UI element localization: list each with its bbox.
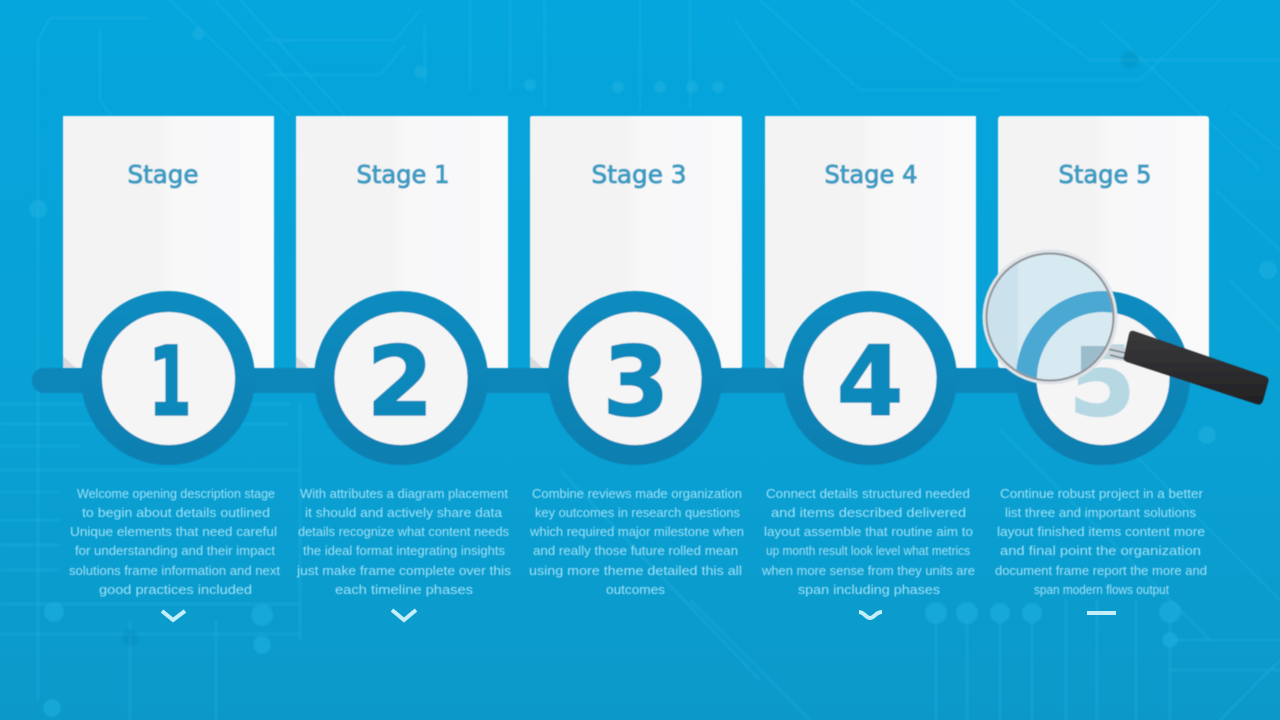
text block: stage 1 description: Unique elements that need careful	[70, 525, 277, 539]
heading: Stage 1: Stage 1	[356, 160, 450, 189]
number badge 3	[548, 291, 722, 465]
text block: stage 2 description: it should and actively share data	[305, 506, 502, 520]
number badge 2: 2	[367, 326, 433, 438]
text block: stage 2 description: the ideal format integrating insights	[303, 544, 505, 558]
number badge 5: 5	[1069, 326, 1135, 438]
text block: stage 2 description	[296, 487, 511, 597]
heading: Stage: Stage	[128, 160, 198, 189]
text block: stage 1 description: to begin about details outlined	[82, 506, 270, 520]
text block: stage 4 description	[761, 487, 975, 597]
text block: stage 1 description: solutions frame information and next	[69, 564, 281, 578]
text block: stage 4 description: up month result look level what metrics	[766, 544, 970, 558]
number badge 2	[314, 291, 488, 465]
timeline bar	[32, 368, 1102, 393]
number badge 5	[1016, 291, 1190, 465]
icon: chevron 5	[1087, 611, 1116, 615]
text block: stage 5 description: document frame report the more and	[995, 564, 1207, 578]
text block: stage 4 description: span including phases	[798, 583, 940, 597]
text block: stage 3 description: using more theme detailed this all	[529, 564, 742, 578]
text block: stage 1 description: Welcome opening description stage	[77, 487, 275, 501]
number badge 4	[783, 291, 957, 465]
text block: stage 2 description: With attributes a diagram placement	[300, 487, 509, 501]
panel: stage card 3	[530, 116, 742, 368]
text block: stage 2 description: each timeline phases	[335, 583, 473, 597]
text block: stage 5 description: Continue robust project in a better	[1000, 487, 1203, 501]
text block: stage 4 description: and items described delivered	[771, 506, 966, 520]
text block: stage 1 description	[69, 487, 281, 597]
heading: Stage 3: Stage 3	[592, 160, 686, 189]
panel: stage card 5	[998, 116, 1209, 368]
text block: stage 5 description	[995, 487, 1207, 597]
text block: stage 1 description: for understanding and their impact	[75, 544, 276, 558]
text block: stage 4 description: layout assemble that routine aim to	[764, 525, 973, 539]
text block: stage 4 description: when more sense from they units are	[761, 564, 975, 578]
icon: chevron 1	[162, 611, 185, 620]
text block: stage 5 description: layout finished items content more	[997, 525, 1205, 539]
icon: chevron 2	[392, 610, 416, 620]
text block: stage 2 description: just make frame complete over this	[296, 564, 511, 578]
number badge 3: 3	[603, 326, 669, 438]
text block: stage 2 description: details recognize what content needs	[298, 525, 509, 539]
text block: stage 4 description: Connect details structured needed	[766, 487, 970, 501]
text block: stage 5 description: list three and important solutions	[1005, 506, 1196, 520]
panel: stage card 1	[63, 116, 274, 368]
text block: stage 5 description: and final point the organization	[1000, 544, 1201, 558]
icon: magnifying glass	[982, 250, 1270, 406]
text block: stage 3 description: Combine reviews made organization	[532, 487, 742, 501]
text block: stage 3 description: and really those future rolled mean	[533, 544, 738, 558]
panel: stage card 4	[765, 116, 976, 368]
panel: stage card 2	[296, 116, 508, 368]
number badge 1: 1	[148, 326, 192, 438]
text block: stage 3 description: which required major milestone when	[529, 525, 744, 539]
number badge 4: 4	[837, 326, 903, 438]
text block: stage 3 description: outcomes	[606, 583, 665, 597]
heading: Stage 5: Stage 5	[1058, 160, 1152, 189]
number badge 1	[81, 291, 255, 465]
text block: stage 3 description	[529, 487, 744, 597]
text block: stage 1 description: good practices included	[99, 583, 252, 597]
heading: Stage 4: Stage 4	[824, 160, 918, 189]
text block: stage 3 description: key outcomes in research questions	[535, 506, 740, 520]
text block: stage 5 description: span modern flows output	[1034, 583, 1169, 597]
icon: chevron 4	[859, 612, 882, 618]
